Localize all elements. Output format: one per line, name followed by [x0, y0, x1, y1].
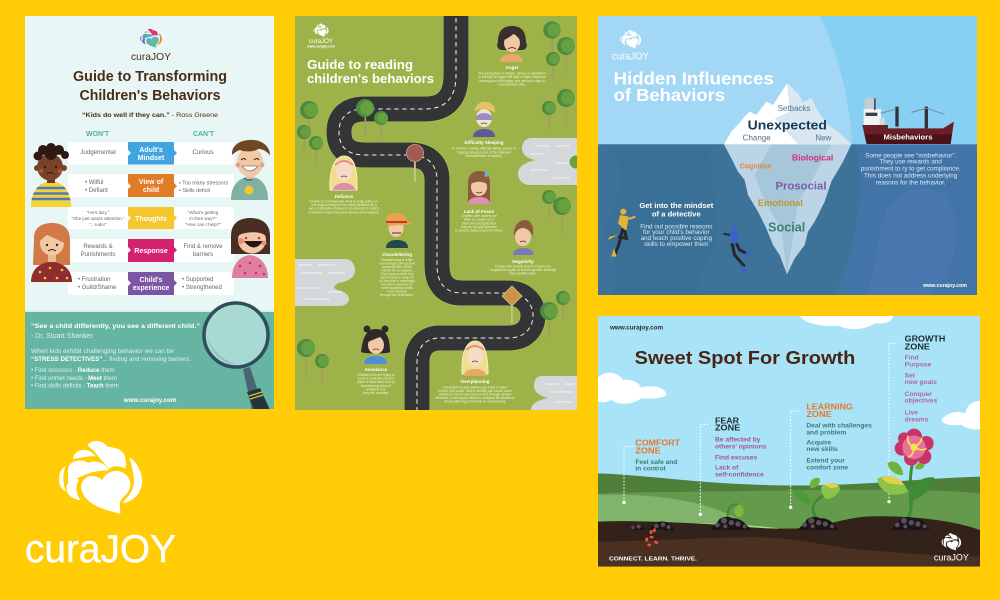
logo: large curaJOY: [25, 441, 176, 571]
iceberg labels: Biological: [792, 152, 833, 162]
zone: growth: GROWTH: [905, 335, 946, 344]
sign: diamond: [502, 286, 522, 323]
clouds: [598, 316, 980, 430]
body text: When kids exhibit challenging behavior we can be: [31, 348, 174, 355]
lake: lower right: [531, 376, 577, 410]
block: lack of focus: to what is going on around them.: [455, 229, 503, 233]
title: [74, 70, 226, 100]
block: defiance: lack of discipline instead of an attempt to control: [309, 207, 379, 211]
iceberg labels: Cognitive: [740, 164, 772, 171]
row: thoughts: “She just wants attention.”: [71, 216, 125, 221]
zone: growth: Purpose: [905, 362, 932, 369]
block: lack of focus: their own thoughts that: [462, 221, 496, 225]
row: response: barriers: [193, 252, 213, 258]
block: chandeliering: them straight: [387, 290, 407, 294]
text: misbehaviors explanation: [861, 153, 961, 186]
text: misbehaviors explanation: They use rewards and: [879, 159, 942, 166]
block: anger: Anger: [505, 65, 519, 70]
text: misbehaviors explanation: Some people see “misbehavior”.: [865, 153, 956, 160]
row: child's experience: • Guild/Shame: [78, 285, 117, 291]
character: frowning boy: [31, 143, 71, 207]
logo: colored curaJOY: [131, 29, 171, 63]
zone: learning: comfort zone: [806, 464, 848, 471]
iceberg labels: Unexpected: [748, 118, 827, 132]
block: anger: is enough to trigger the fight or flight response: [478, 75, 546, 79]
ship: [862, 98, 954, 144]
block: negativity: People with anxiety tend to experience: [495, 264, 551, 268]
block: difficulty sleeping: characteristics of anxiety.: [466, 154, 502, 158]
zone: growth: ZONE: [905, 342, 931, 351]
zone: fear: Find excuses: [715, 454, 757, 461]
row: thoughts: [68, 207, 234, 229]
block: lack of focus: Children with anxiety are: [461, 214, 497, 218]
row: view of child: • Wilful: [85, 180, 103, 186]
block: anger: [478, 26, 546, 87]
row: response: [68, 239, 234, 262]
hills: [598, 473, 980, 535]
block: overplanning: children to try to take back control through defiant: [439, 392, 511, 396]
row: thoughts: “He's lazy.”: [87, 210, 110, 215]
zone: learning: new skills: [806, 446, 838, 453]
block: avoidance: [357, 326, 395, 395]
website: www.curajoy.com: [123, 397, 177, 404]
iceberg: [724, 83, 851, 274]
block: chandeliering: event suddenly sends: [381, 286, 413, 290]
logo: white curaJOY: curaJOY: [612, 51, 649, 62]
block: avoidance: experiencing them of: [361, 384, 391, 388]
title: of Behaviors: [614, 85, 725, 105]
title: Hidden Influences: [614, 68, 774, 88]
logo: white curaJOY: [934, 533, 969, 563]
block: lack of focus: often so caught up in: [464, 218, 494, 222]
row: response: Rewards &: [83, 244, 113, 250]
block: difficulty sleeping: [452, 102, 517, 158]
title: Guide to Transforming: [73, 69, 227, 85]
quote: “Kids do well if they can.” - Ross Greene: [82, 112, 219, 119]
zone: learning: and problem: [806, 429, 846, 436]
row: adult's mindset: Adult's: [139, 147, 163, 154]
row: adult's mindset: Judgemental: [80, 149, 116, 156]
zone: fear: others' opinions: [715, 443, 767, 450]
title: [308, 60, 434, 83]
trees: [297, 21, 575, 383]
block: avoidance: they are avoiding.: [363, 391, 389, 395]
body text: • Find unmet needs - Meet them: [31, 376, 117, 382]
panel: guide to transforming children's behaviors: [25, 16, 274, 410]
row: thoughts: in their way?”: [189, 216, 217, 221]
row: response: Response: [134, 248, 168, 255]
row: thoughts: “What's getting: [188, 210, 219, 215]
zone: growth: dreams: [905, 417, 929, 424]
text: detective mindset: of a detective: [652, 210, 701, 219]
zone: growth: Set: [905, 372, 916, 379]
zone: growth: Conquer: [905, 391, 932, 398]
plant: flower: [877, 429, 935, 530]
character: smiling boy: [231, 140, 270, 200]
block: avoidance: place or task often end up: [357, 380, 395, 384]
text: detective mindset: and teach positive coping: [641, 235, 713, 242]
ship label: Misbehaviors: [884, 133, 932, 142]
zone: fear: FEAR: [715, 416, 739, 425]
bottom section: stress detectives: [25, 310, 274, 410]
title: Children's Behaviors: [80, 88, 220, 104]
leader lines: [624, 343, 898, 514]
body text: “STRESS DETECTIVES”... finding and removing barriers.: [31, 356, 191, 363]
plant: seed stage: [630, 521, 674, 546]
diver: yellow: [608, 209, 635, 257]
block: overplanning: where planning is minimal or unnecessary.: [444, 400, 506, 404]
zone: growth: objectives: [905, 398, 938, 405]
text: detective mindset: for your child's behavior: [643, 229, 710, 236]
block: anger: leaving your child angry and without a way to: [479, 79, 545, 83]
row: view of child: • Defiant: [85, 188, 108, 194]
row: adult's mindset: Curious: [192, 149, 214, 156]
water: [598, 144, 977, 295]
row: child's experience: • Strengthened: [182, 285, 222, 291]
zone: fear: self-confidence: [715, 471, 764, 478]
zone: learning: [806, 402, 872, 471]
tagline: CONNECT. LEARN. THRIVE.: [609, 557, 697, 563]
body text: • Find stressors - Reduce them: [31, 368, 114, 374]
text: detective mindset: Get into the mindset: [639, 201, 714, 210]
row: view of child: View of: [139, 179, 164, 186]
zone: fear: Be affected by: [715, 437, 761, 444]
iceberg labels: New: [815, 133, 832, 142]
block: difficulty sleeping: staying asleep is one of the hallmark: [457, 150, 511, 154]
logo: large curaJOY: curaJOY: [25, 528, 176, 571]
block: lack of focus: Lack of Focus: [464, 209, 495, 214]
website: www.curajoy.com: [922, 283, 967, 289]
row: child's experience: • Supported: [182, 277, 213, 283]
iceberg labels: [740, 104, 833, 235]
title: Sweet Spot For Growth: [635, 347, 855, 368]
character: upset girl: [31, 223, 72, 282]
title: Guide to reading: [307, 57, 413, 72]
block: overplanning: in their root cause. Where anxiety can cause some: [438, 389, 512, 393]
ground: [598, 516, 980, 567]
row: thoughts: “How can I help?”: [185, 222, 221, 227]
block: chandeliering: [379, 213, 415, 297]
text: misbehaviors explanation: This does not address underlying: [864, 172, 958, 179]
block: negativity: Negativity: [512, 259, 534, 264]
iceberg labels: Setbacks: [778, 104, 810, 113]
block: difficulty sleeping: Difficulty Sleeping: [464, 140, 504, 145]
row: thoughts: “...rude!”: [89, 222, 107, 227]
row: child's experience: experience: [133, 285, 169, 292]
zone: comfort: [635, 439, 680, 473]
block: chandeliering: Chandeliering: [382, 252, 412, 257]
block: chandeliering: suddenly flies off the: [382, 265, 412, 269]
logo: colored curaJOY: curaJOY: [131, 51, 171, 63]
icon: magnifying glass: [204, 303, 270, 410]
block: chandeliering: They have pushed hurt: [380, 272, 414, 276]
block: chandeliering: through the chandelier.: [380, 293, 414, 297]
title: [614, 68, 774, 105]
block: overplanning: [436, 341, 515, 404]
iceberg labels: Social: [768, 221, 805, 235]
panel: hidden influences of behaviors: [598, 16, 977, 295]
body text: • Find skills deficits - Teach them: [31, 384, 119, 390]
column headings: [86, 131, 214, 136]
website: www.curajoy.com: [609, 325, 663, 332]
row: response: Punishments: [81, 252, 115, 258]
logo: white curaJOY with url: curaJOY: [309, 38, 334, 45]
iceberg labels: Prosocial: [775, 181, 826, 193]
panel: guide to reading children's behaviors: [295, 10, 582, 415]
block: overplanning: Overplanning: [460, 379, 490, 384]
zone: growth: new goals: [905, 379, 937, 386]
zone: comfort: ZONE: [635, 446, 661, 455]
text: detective mindset: skills to empower them: [644, 241, 709, 248]
text: misbehaviors explanation: punishment to ry to get compliance.: [861, 166, 961, 173]
zone: learning: Deal with challenges: [806, 422, 872, 429]
zone: growth: Live: [905, 410, 918, 417]
diver: blue: [723, 226, 752, 273]
block: avoidance: Avoidance: [365, 367, 388, 372]
body text: [31, 348, 191, 390]
block: chandeliering: and anxiety so deep for: [380, 276, 415, 280]
road: [339, 10, 533, 415]
row: thoughts: Thoughts: [135, 216, 167, 223]
quote text: “See a child differently, you see a different child.”: [31, 323, 200, 330]
zone: fear: [715, 416, 767, 478]
zone: learning: ZONE: [806, 410, 832, 419]
block: anger: communicate why.: [498, 83, 526, 87]
column headings: WON'T: [86, 131, 110, 138]
iceberg labels: Emotional: [758, 198, 803, 208]
block: negativity: negative thoughts at a much greater intensity: [490, 268, 556, 272]
title: children's behaviors: [307, 71, 434, 86]
block: defiance: Defiance: [335, 194, 354, 199]
zone: learning: LEARNING: [806, 402, 853, 411]
block: avoidance: whatever it is: [366, 387, 386, 391]
row: view of child: [68, 174, 234, 197]
iceberg labels: Change: [743, 133, 771, 142]
block: overplanning: behavior, it can cause others to overplan for situations: [436, 396, 515, 400]
plant: learning stage: [793, 478, 840, 530]
block: chandeliering: so long that a seemingly: [379, 279, 415, 283]
block: lack of focus: they do not pay attention: [461, 225, 497, 229]
text: detective mindset: Find out possible reasons: [640, 223, 712, 230]
block: avoidance: Children who are trying to: [357, 373, 395, 377]
sign: round red: [406, 144, 424, 182]
zone: growth: Find: [905, 355, 919, 362]
text: misbehaviors explanation: reasons for the behavior.: [876, 179, 946, 186]
text: detective mindset: [639, 201, 714, 248]
zone: growth: [905, 335, 946, 424]
block: overplanning: Overplanning and defiance go hand in hand: [443, 385, 507, 389]
plant: sprout: [711, 504, 751, 530]
row: child's experience: • Frustration: [78, 277, 110, 283]
zone: comfort: in control: [635, 466, 666, 473]
zone: learning: Extend your: [806, 458, 845, 465]
row: view of child: • Too many stressors: [179, 180, 229, 186]
row: child's experience: Child's: [139, 277, 163, 284]
block: chandeliering: a seemingly calm person: [379, 262, 415, 266]
block: chandeliering: handle for no reason.: [381, 268, 413, 272]
column headings: CAN'T: [193, 131, 215, 138]
row: adult's mindset: Mindset: [138, 155, 165, 162]
zone: comfort: COMFORT: [635, 439, 680, 448]
zone: comfort: Feel safe and: [635, 459, 678, 466]
row: response: Find & remove: [183, 244, 223, 250]
block: defiance: a situation where they feel anxious and helpless.: [309, 210, 380, 214]
block: negativity: than positive ones.: [509, 272, 537, 276]
block: chandeliering: innocent comment or: [382, 282, 413, 286]
block: lack of focus: [455, 170, 503, 233]
logo: white curaJOY: curaJOY: [934, 553, 969, 563]
block: negativity: [490, 220, 556, 276]
logo: white curaJOY: [612, 30, 649, 62]
zone: fear: ZONE: [715, 424, 741, 433]
logo: white curaJOY with url: www.curajoy.com: [306, 44, 335, 48]
lake: upper right: [518, 138, 582, 185]
block: avoidance: avoid a particular person,: [357, 377, 395, 381]
zone: fear: Lack of: [715, 465, 739, 472]
lake: left: [295, 259, 355, 306]
block: defiance: [309, 156, 380, 214]
block: anger: The perception of danger, stress or opposition: [478, 72, 546, 76]
attribution: - Dr. Stuart Shanker: [31, 333, 94, 340]
block: defiance: it is easy to interpret the child's defiance as a: [311, 203, 377, 207]
row: view of child: • Skills deficit: [179, 188, 211, 194]
zone: learning: Acquire: [806, 439, 831, 446]
row: view of child: child: [143, 187, 159, 194]
character: happy girl: [231, 218, 270, 278]
block: defiance: Unable to communicate what is really going on,: [309, 199, 379, 203]
block: chandeliering: Chandeliering is when: [381, 258, 413, 262]
row: adult's mindset: [68, 142, 234, 164]
logo: white curaJOY with url: [306, 24, 335, 48]
panel: sweet spot for growth: [598, 316, 980, 567]
block: difficulty sleeping: In children, having difficulty falling asleep or: [452, 147, 517, 151]
row: child's experience: [68, 272, 234, 295]
